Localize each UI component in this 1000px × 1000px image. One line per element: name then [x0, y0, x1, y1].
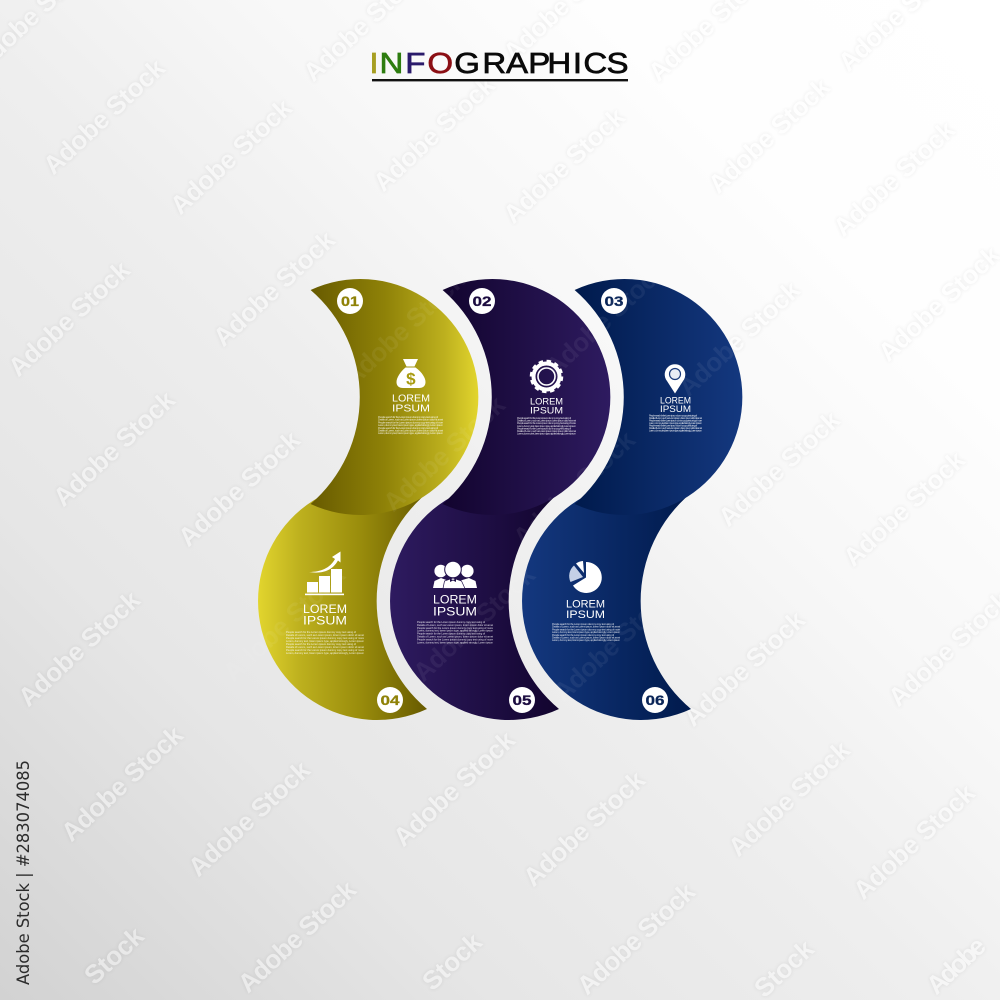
text block: step 06: People search for the Lorem ipsum dummy copy text using of more	[552, 627, 620, 631]
watermark pattern over panels: Adobe Stock	[207, 224, 341, 352]
watermark pattern over panels: Adobe Stock	[507, 424, 641, 552]
watermark pattern on background: Adobe Stock	[367, 69, 501, 197]
watermark pattern over panels: Adobe Stock	[539, 254, 673, 382]
text block: step 02: Details of Lorem, such as Lorem ipsum, lorem ipsum dolor sit amet	[517, 429, 576, 433]
heading: step 04	[303, 602, 347, 628]
heading: step 05: LOREM	[433, 594, 477, 606]
text block: step 05: People search for the Lorem ipsum dummy copy text using of more	[417, 637, 494, 641]
watermark pattern on background: Adobe Stock	[837, 444, 971, 572]
watermark pattern on background: Adobe Stock	[672, 274, 806, 402]
text block: step 02: People search for the Lorem ipsum dummy copy text using of more	[517, 421, 576, 425]
heading: step 04: LOREM	[303, 602, 347, 616]
text block: step 03: Details of Lorem, such as Lorem ipsum, lorem ipsum dolor sit amet	[649, 426, 702, 430]
icon: team of people	[433, 561, 477, 588]
watermark pattern on background: Adobe Stock	[702, 71, 836, 199]
panel: step 05 purple lower crescent	[390, 482, 559, 720]
watermark pattern on background: Adobe Stock	[12, 584, 146, 712]
text block: step 04: People search for the Lorem ipsum dummy copy text using of	[286, 630, 356, 634]
text block: step 03: Details of Lorem, such as Lorem ipsum, lorem ipsum dolor sit amet	[649, 416, 702, 420]
text block: step 05: Lorem, dummy text, lorem ipsum type, applied strongly, Lorem ipsum	[417, 640, 494, 644]
heading: step 02	[530, 396, 563, 416]
heading: step 03: LOREM	[660, 396, 691, 406]
text block: step 03: Lorem, dummy text, lorem ipsum type, applied strongly, Lorem ipsum	[649, 421, 703, 425]
text block: step 02: Lorem, dummy text, lorem ipsum type, applied strongly, Lorem ipsum	[517, 424, 577, 428]
text block: step 06	[552, 622, 621, 642]
stock id caption: Adobe Stock | #283074085	[14, 760, 34, 985]
badge: 04: 04	[380, 693, 400, 708]
watermark pattern on background: Adobe Stock	[387, 724, 521, 852]
text block: step 04: People search for the Lorem ipsum dummy copy text using of more	[286, 648, 364, 652]
heading: step 01: IPSUM	[392, 402, 430, 414]
text block: step 05: People search for the Lorem ipsum dummy copy text using of	[417, 620, 485, 624]
text block: step 06: Lorem, dummy text, lorem ipsum type, applied strongly, Lorem ipsum	[552, 638, 621, 642]
heading: step 03	[660, 396, 691, 414]
watermark pattern on background: Adobe Stock	[207, 224, 341, 352]
badge: 02	[469, 288, 495, 314]
text block: step 01: People search for the Lorem ipsum dummy copy text using of	[378, 426, 438, 430]
text block: step 02: Lorem, dummy text, lorem ipsum type, applied strongly, Lorem ipsum	[517, 432, 577, 436]
text block: step 01: Details of Lorem, such as Lorem ipsum, lorem ipsum dolor sit amet	[378, 418, 443, 422]
text block: step 01: Lorem, dummy text, lorem ipsum type, applied strongly, Lorem ipsum	[378, 423, 444, 427]
badge: 05	[509, 687, 535, 713]
watermark pattern on background: Adobe Stock	[55, 719, 189, 847]
panel: step 04 olive lower crescent	[258, 482, 427, 720]
watermark pattern on background: Adobe Stock	[172, 424, 306, 552]
text block: step 05: Lorem, dummy text, lorem ipsum type, applied strongly, Lorem ipsum	[417, 629, 494, 633]
icon: money bag	[396, 359, 426, 388]
watermark pattern on background: Adobe Stock	[827, 114, 961, 242]
watermark pattern over panels: Adobe Stock	[377, 389, 511, 517]
text block: step 03: Lorem, dummy text, lorem ipsum type, applied strongly, Lorem ipsum	[649, 428, 703, 432]
text block: step 04: Details of Lorem, such as Lorem ipsum, lorem ipsum dolor sit amet	[286, 645, 364, 649]
badge: 06: 06	[646, 693, 665, 708]
text block: step 06: People search for the Lorem ipsum dummy copy text using of	[552, 622, 614, 626]
text block: step 04: Lorem, dummy text, lorem ipsum type, applied strongly, Lorem ipsum	[286, 639, 365, 643]
watermark pattern on background: Adobe Stock	[517, 764, 651, 892]
watermark pattern on background: Adobe Stock	[712, 404, 846, 532]
watermark pattern on background: Adobe Stock	[37, 52, 171, 180]
watermark pattern on background: Adobe Stock	[571, 876, 701, 1000]
watermark pattern on background: Adobe Stock	[182, 754, 316, 882]
watermark pattern over panels: Adobe Stock	[672, 274, 806, 402]
badge: 02: 02	[472, 294, 492, 309]
icon: gear	[531, 361, 562, 392]
text block: step 03: People search for the Lorem ipsum dummy copy text using of	[649, 424, 697, 428]
badge: 03	[601, 288, 627, 314]
text block: step 02	[517, 416, 577, 436]
heading: step 01	[392, 392, 430, 414]
text block: step 06: Lorem, dummy text, lorem ipsum type, applied strongly, Lorem ipsum	[552, 630, 621, 634]
text block: step 06: Details of Lorem, such as Lorem ipsum, lorem ipsum dolor sit amet	[552, 625, 620, 629]
icon: location pin	[665, 364, 685, 394]
text block: step 04: People search for the Lorem ipsum dummy copy text using of	[286, 642, 356, 646]
badge: 01: 01	[341, 294, 360, 309]
text block: step 02: People search for the Lorem ipsum dummy copy text using of	[517, 426, 571, 430]
watermark pattern on background: Adobe Stock	[232, 874, 362, 999]
text block: step 01: Lorem, dummy text, lorem ipsum type, applied strongly, Lorem ipsum	[378, 431, 444, 435]
text block: step 01: People search for the Lorem ipsum dummy copy text using of more	[378, 420, 444, 424]
badge: 06	[642, 687, 668, 713]
text block: step 05: People search for the Lorem ipsum dummy copy text using of more	[417, 626, 494, 630]
text block: step 05	[417, 620, 494, 644]
watermark pattern on background: Adobe Stock	[722, 734, 856, 862]
text block: step 04: Lorem, dummy text, lorem ipsum type, applied strongly, Lorem ipsum	[286, 651, 365, 655]
text block: step 01	[378, 415, 444, 435]
text block: step 03	[649, 414, 703, 432]
watermark pattern on background: Stock	[416, 926, 488, 996]
watermark pattern on background: Adobe Stock	[677, 604, 811, 732]
heading: step 04: IPSUM	[303, 614, 347, 628]
watermark pattern on background: Adobe Stock	[847, 777, 981, 905]
watermark pattern on background: Adobe	[920, 931, 992, 1000]
heading: step 02: LOREM	[530, 396, 563, 408]
watermark pattern on background: Stock	[78, 920, 150, 990]
heading: step 02: IPSUM	[530, 406, 563, 416]
heading: step 06: LOREM	[566, 598, 605, 610]
text block: step 04: Details of Lorem, such as Lorem ipsum, lorem ipsum dolor sit amet	[286, 633, 364, 637]
watermark pattern over panels: Adobe Stock	[407, 559, 541, 687]
text block: step 05: Details of Lorem, such as Lorem ipsum, lorem ipsum dolor sit amet	[417, 623, 493, 627]
text block: step 04: People search for the Lorem ipsum dummy copy text using of more	[286, 636, 364, 640]
panel: step 01 olive upper crescent	[311, 279, 478, 515]
badge: 04	[377, 687, 403, 713]
heading: step 03: IPSUM	[660, 404, 691, 414]
watermark pattern over panels	[207, 224, 806, 707]
watermark pattern over panels: Adobe Stock	[547, 579, 681, 707]
heading: step 06	[566, 598, 605, 621]
text block: step 01: Details of Lorem, such as Lorem ipsum, lorem ipsum dolor sit amet	[378, 428, 443, 432]
watermark pattern over panels: Adobe Stock	[337, 264, 471, 392]
text block: step 03: People search for the Lorem ipsum dummy copy text using of more	[649, 418, 702, 422]
watermark pattern over panels: Adobe Stock	[217, 559, 351, 687]
text block: step 03: People search for the Lorem ipsum dummy copy text using of	[649, 414, 697, 418]
text block: step 01: People search for the Lorem ipsum dummy copy text using of	[378, 415, 438, 419]
heading: step 05: IPSUM	[433, 606, 477, 618]
icon: growth chart	[305, 552, 344, 595]
watermark pattern on background: Adobe Stock	[164, 92, 298, 220]
heading: step 06: IPSUM	[566, 609, 605, 621]
icon: pie chart	[569, 561, 602, 593]
badge: 01	[337, 288, 363, 314]
panel: step 06 blue lower crescent	[522, 482, 691, 720]
text block: step 06: Details of Lorem, such as Lorem ipsum, lorem ipsum dolor sit amet	[552, 636, 620, 640]
text block: step 05: People search for the Lorem ipsum dummy copy text using of	[417, 632, 485, 636]
watermark pattern on background: Adobe Stock	[47, 384, 181, 512]
text block: step 02: Details of Lorem, such as Lorem ipsum, lorem ipsum dolor sit amet	[517, 419, 576, 423]
panel: step 03 blue upper crescent	[575, 279, 742, 515]
badge: 05: 05	[512, 693, 532, 708]
text block: step 05: Details of Lorem, such as Lorem ipsum, lorem ipsum dolor sit amet	[417, 634, 493, 638]
watermark pattern on background: Adobe Stock	[497, 101, 631, 229]
heading: step 05	[433, 594, 477, 618]
watermark pattern on background: Adobe Stock	[2, 254, 136, 382]
heading: step 01: LOREM	[392, 392, 430, 404]
badge: 03: 03	[604, 294, 624, 309]
icon: money bag: $	[406, 370, 416, 388]
text block: step 06: People search for the Lorem ipsum dummy copy text using of	[552, 633, 614, 637]
panel: step 02 purple upper crescent	[443, 279, 610, 515]
text block: step 02: People search for the Lorem ipsum dummy copy text using of	[517, 416, 571, 420]
title: INFOGRAPHICS	[369, 47, 629, 80]
text block: step 04	[286, 630, 365, 655]
